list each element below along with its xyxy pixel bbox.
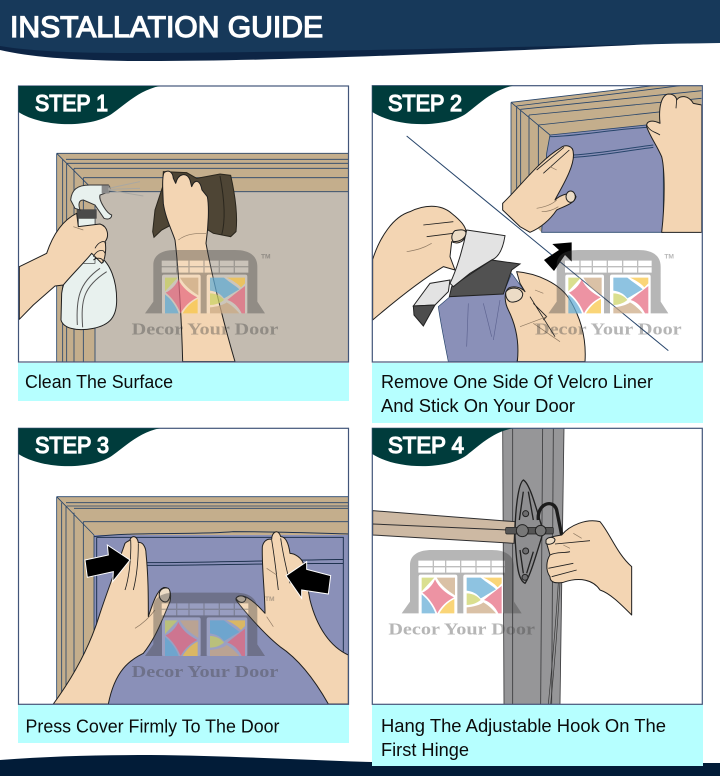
caption: step 4 <box>372 705 703 766</box>
logo watermark: Decor Your Door <box>132 662 279 681</box>
caption: step 3: Press Cover Firmly To The Door <box>26 716 280 736</box>
logo watermark: TM <box>265 596 275 603</box>
step 3 badge <box>18 428 160 466</box>
logo watermark <box>535 250 682 338</box>
panel: step 3 <box>18 428 349 743</box>
caption: step 2 <box>372 363 703 423</box>
header banner <box>0 0 720 61</box>
caption: step 4: First Hinge <box>381 739 469 760</box>
step 4 badge <box>372 428 513 466</box>
logo watermark <box>388 550 536 638</box>
step 4 badge: STEP 4 <box>388 432 464 458</box>
title: INSTALLATION GUIDE <box>10 11 323 44</box>
step 1 badge: STEP 1 <box>35 90 108 116</box>
caption: step 1: Clean The Surface <box>25 371 173 392</box>
caption: step 4: Hang The Adjustable Hook On The <box>381 715 666 736</box>
logo watermark: TM <box>261 253 271 260</box>
panel: step 2 <box>372 86 703 423</box>
illustration: hang hook on hinge <box>373 428 632 704</box>
logo watermark: TM <box>664 253 674 260</box>
logo watermark: Decor Your Door <box>132 319 279 338</box>
panel: step 4 <box>372 428 703 766</box>
logo watermark: Decor Your Door <box>388 619 536 638</box>
illustration: cleaning the door surface <box>19 153 348 362</box>
step 1 badge <box>18 86 160 124</box>
caption: step 2: Remove One Side Of Velcro Liner <box>381 371 653 392</box>
step 3 badge: STEP 3 <box>35 432 109 458</box>
caption: step 3 <box>18 705 349 743</box>
step 2 badge: STEP 2 <box>388 90 462 116</box>
logo watermark <box>132 593 279 681</box>
logo watermark <box>132 250 279 338</box>
caption: step 1 <box>18 363 349 401</box>
caption: step 2: And Stick On Your Door <box>381 395 575 416</box>
illustration: press cover to door <box>53 497 348 704</box>
logo watermark: Decor Your Door <box>535 319 682 338</box>
footer band <box>0 755 720 776</box>
step 2 badge <box>372 86 513 124</box>
panel: step 1 <box>18 86 349 401</box>
illustration: remove liner and stick <box>373 86 702 362</box>
